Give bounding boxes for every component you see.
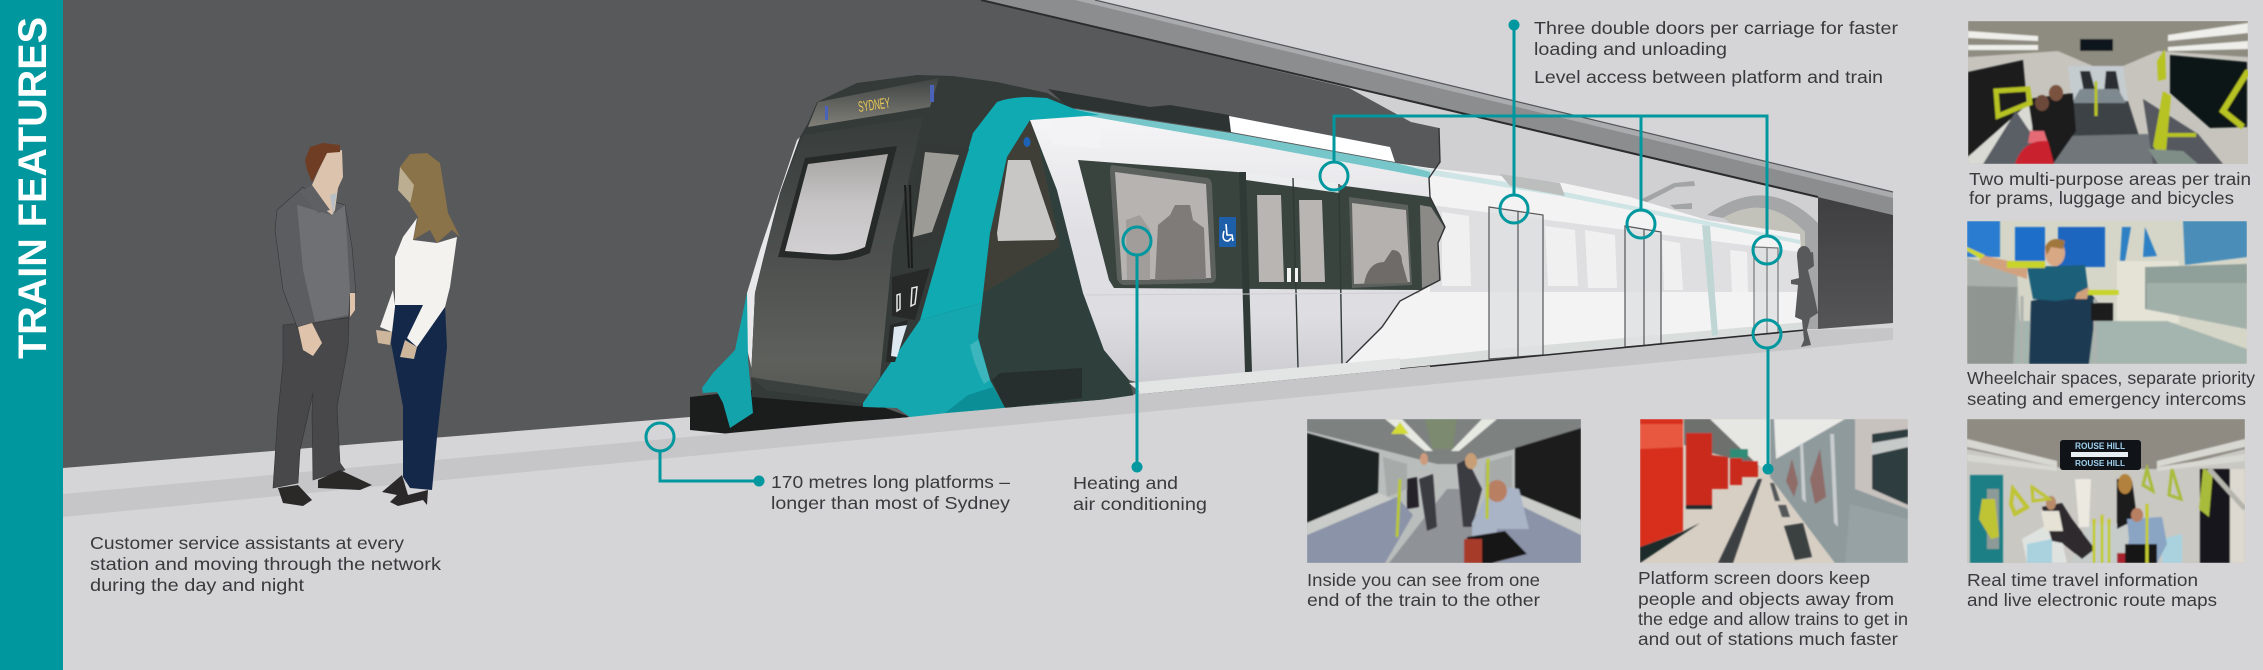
- hands: [376, 330, 417, 359]
- caption: wheelchair: Wheelchair spaces, separate priority: [1967, 368, 2255, 388]
- lower skirt panel: [992, 368, 1082, 408]
- callout: customer service text: [90, 533, 441, 595]
- destination display: [808, 78, 939, 127]
- white nose sliver: [745, 137, 800, 370]
- platform screen door 3: [1754, 247, 1778, 335]
- teal roof stripe: [1068, 108, 1430, 178]
- callout: heating and air conditioning: air conditioning: [1073, 494, 1207, 514]
- ghost lower shade: [1340, 322, 1805, 375]
- callout: customer service text: during the day and night: [90, 575, 304, 595]
- callout: platform length: 170 metres long platforms –: [771, 472, 1010, 492]
- hair: [305, 143, 340, 182]
- platform screen door 2: [1625, 226, 1661, 347]
- floor in front: [63, 340, 1893, 670]
- photo: real time information: ROUSE HILL: [2075, 459, 2125, 468]
- teal swoop lower: [863, 303, 1005, 417]
- light strip under body: [1129, 358, 1400, 394]
- hair: [400, 153, 460, 243]
- roof beam: [981, 0, 1893, 215]
- shoes: [278, 470, 372, 506]
- hands: [298, 293, 355, 356]
- white roof wedge: [1229, 116, 1395, 162]
- ghost window band: [1430, 205, 1800, 292]
- trousers: [391, 305, 447, 490]
- caption: real time information: Real time travel information: [1967, 570, 2198, 590]
- ghost roof unit: [1500, 174, 1565, 196]
- shirt collar: [330, 193, 337, 215]
- side dark panel: [978, 120, 1134, 408]
- caption: multi-purpose: for prams, luggage and bicycles: [1969, 188, 2234, 208]
- teal highlight: [970, 340, 990, 384]
- photo: real time information: ROUSE HILL: [2075, 441, 2125, 451]
- callout: customer service text: Customer service assistants at every: [90, 533, 404, 553]
- windscreen: [778, 146, 897, 260]
- roof rounded cap: [1050, 113, 1100, 148]
- platform slab covering train base: [650, 366, 1430, 460]
- caption: multi-purpose: Two multi-purpose areas per train: [1969, 169, 2251, 189]
- callout: doors text: loading and unloading: [1534, 39, 1727, 59]
- ghost train body: [1340, 155, 1805, 375]
- door top: [1246, 172, 1340, 193]
- wheelchair sign: [1219, 217, 1236, 247]
- silhouette passenger: [1791, 246, 1818, 347]
- face and neck: [312, 150, 343, 215]
- staff: female customer service assistant: [376, 153, 460, 506]
- ghost tunnel interior: [1340, 88, 1818, 376]
- window band: [1078, 160, 1445, 290]
- sweater chest: [297, 205, 350, 322]
- staff: male customer service assistant: [273, 143, 372, 506]
- photo: multi-purpose area: [1968, 21, 2248, 164]
- rear fender: [702, 293, 753, 428]
- cab door window: [912, 143, 969, 245]
- door frame: [1239, 172, 1252, 372]
- teal swoop upper: [920, 97, 1100, 320]
- photo: real time information: [1967, 419, 2245, 563]
- destination markers: [825, 85, 934, 120]
- blue marker: [1024, 137, 1030, 147]
- caption: platform screen doors: [1638, 568, 1908, 649]
- train: [690, 75, 1445, 434]
- face: [398, 163, 418, 203]
- callout: platform length: [646, 423, 1010, 513]
- dark station wall: [63, 0, 1440, 468]
- photo: platform screen doors: [1640, 419, 1908, 563]
- door lines: [1293, 178, 1342, 368]
- callout: doors text: Level access between platform and train: [1534, 67, 1883, 87]
- platform edge stripe: [63, 328, 1893, 517]
- broken edge outline: [1346, 128, 1445, 363]
- caption: interior: [1307, 570, 1540, 610]
- second window: [1349, 197, 1412, 288]
- caption: platform screen doors: and out of stations much faster: [1638, 629, 1898, 649]
- door windows: [1257, 195, 1325, 282]
- callout: doors text: Three double doors per carriage for faster: [1534, 18, 1898, 38]
- side bar: [0, 0, 63, 670]
- face lower band: [751, 377, 873, 403]
- callout: heating and air conditioning: Heating and: [1073, 473, 1178, 493]
- caption: platform screen doors: people and objects away from: [1638, 589, 1894, 609]
- cab shell: [751, 75, 1077, 408]
- right dark wall: [1818, 197, 1893, 329]
- underframe: [690, 390, 910, 434]
- title: TRAIN FEATURES: [11, 17, 55, 359]
- caption: real time information: [1967, 570, 2217, 610]
- caption: interior: end of the train to the other: [1307, 590, 1540, 610]
- teal lower shade: [945, 387, 1005, 413]
- ghost roof stripe: [1400, 164, 1800, 244]
- body seam: [1086, 293, 1420, 295]
- platform edge line: [1142, 330, 1805, 394]
- cab lights: [886, 268, 930, 362]
- tunnel arch: [1707, 195, 1818, 329]
- passengers in window: [1155, 205, 1206, 280]
- photo: wheelchair space: [1967, 221, 2247, 364]
- callout: customer service text: station and moving through the network: [90, 554, 441, 574]
- caption: platform screen doors: Platform screen doors keep: [1638, 568, 1870, 588]
- callout: platform length: longer than most of Sydney: [771, 493, 1010, 513]
- screen door connector dot: [1762, 419, 1774, 474]
- callout: doors text: [1534, 18, 1898, 87]
- caption: real time information: and live electronic route maps: [1967, 590, 2217, 610]
- ghost carriage gap: [1702, 225, 1718, 336]
- caption: wheelchair: [1967, 368, 2255, 409]
- cab face: [751, 117, 923, 403]
- ghosted train section: [1142, 155, 1805, 394]
- callout: doors connectors: [1320, 25, 1781, 469]
- destination text: SYDNEY: [857, 95, 891, 116]
- caption: wheelchair: seating and emergency intercoms: [1967, 389, 2246, 409]
- catenary arm: [1640, 181, 1695, 209]
- shirt: [380, 218, 457, 347]
- white body: [1030, 112, 1445, 383]
- callout: heating and air conditioning: [1073, 227, 1207, 514]
- caption: multi-purpose: [1969, 169, 2251, 208]
- sweater: [275, 187, 356, 327]
- third window: [1420, 205, 1444, 288]
- caption: platform screen doors: the edge and allow trains to get in: [1638, 609, 1908, 629]
- wiper: [905, 185, 912, 268]
- platform screen door 1: [1489, 207, 1543, 359]
- connector dot: [1508, 20, 1520, 30]
- cab side window: [997, 160, 1056, 241]
- tunnel section: [981, 0, 1893, 329]
- roof unit: [1048, 89, 1231, 132]
- main window: [1110, 165, 1216, 285]
- boots: [382, 475, 428, 506]
- photo: train interior: [1307, 419, 1581, 563]
- trousers: [273, 318, 349, 488]
- caption: interior: Inside you can see from one: [1307, 570, 1540, 590]
